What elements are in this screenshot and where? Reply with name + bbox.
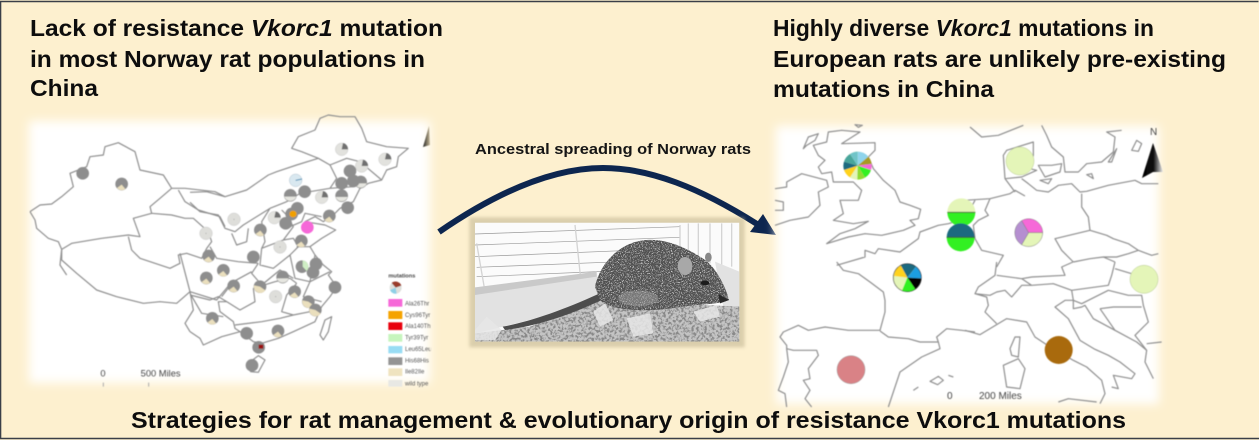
legend: mutations: wild type bbox=[404, 381, 429, 387]
scale label: Europe bbox=[947, 391, 1022, 402]
panel: Europe map bbox=[775, 125, 1163, 407]
panel: China map bbox=[29, 115, 433, 387]
legend: mutations: mutations bbox=[388, 273, 415, 279]
legend: mutations: Ala26Thr bbox=[405, 301, 429, 307]
rat tail bbox=[503, 294, 602, 330]
legend: mutations: Cys96Tyr bbox=[405, 313, 430, 319]
north arrow: China bbox=[423, 126, 430, 147]
pie chart: Denmark bbox=[1006, 147, 1034, 175]
legend: mutations: His68His bbox=[405, 358, 429, 364]
pie charts: China bbox=[76, 143, 391, 372]
pie chart: Belgium bbox=[947, 223, 975, 251]
scale label: Europe: 0 bbox=[947, 391, 953, 402]
photo: Norway rat bbox=[469, 217, 745, 347]
arrow: China to Europe bbox=[439, 168, 776, 235]
heading: Europe: mutations in China bbox=[773, 76, 994, 102]
north arrow: Europe bbox=[1142, 127, 1163, 178]
China south-west outline bbox=[62, 250, 233, 332]
footer heading: Strategies for rat management & evolutionary origin of resistance Vkorc1 mutations bbox=[131, 407, 1126, 433]
label: ancestral spreading: Ancestral spreading of Norway rats bbox=[475, 141, 751, 158]
pie chart: Scotland bbox=[843, 152, 872, 180]
legend: mutations: Tyr39Tyr bbox=[405, 336, 428, 342]
pie chart: Netherlands bbox=[947, 198, 975, 226]
pie chart: Spain bbox=[837, 356, 865, 384]
legend: mutations: Ile82Ile bbox=[405, 370, 425, 376]
pie chart: Italy bbox=[1045, 336, 1073, 364]
scale label: Europe: 200 Miles bbox=[979, 391, 1022, 402]
China west outline bbox=[30, 143, 225, 275]
heading: China: China bbox=[30, 75, 98, 101]
Italy and central Europe borders bbox=[965, 262, 1162, 404]
heading: China bbox=[30, 15, 443, 101]
bedding bbox=[475, 300, 739, 342]
legend: mutations bbox=[388, 273, 433, 387]
France and Iberia coasts bbox=[778, 262, 975, 407]
heading: Europe: Highly diverse Vkorc1 mutations in bbox=[773, 15, 1154, 41]
legend: mutations: Ala140Thr bbox=[405, 324, 433, 330]
rat ears and eye bbox=[678, 257, 692, 275]
scale bar: China: 0 bbox=[100, 368, 106, 378]
heading: Europe: European rats are unlikely pre-existing bbox=[773, 46, 1226, 72]
heading: China: Lack of resistance Vkorc1 mutation bbox=[30, 15, 443, 41]
heading: China: in most Norway rat populations in bbox=[30, 46, 425, 72]
scale bar: China bbox=[100, 368, 181, 387]
pie chart: East bbox=[1130, 265, 1158, 293]
legend: mutations: Leu65Leu bbox=[405, 347, 432, 353]
rat body bbox=[595, 240, 729, 310]
heading: Europe bbox=[773, 15, 1226, 102]
China east outline and provinces bbox=[190, 115, 408, 372]
scale bar: China: 500 Miles bbox=[141, 368, 181, 378]
pie chart: Germany bbox=[1015, 219, 1043, 247]
north arrow: Europe: N bbox=[1150, 127, 1157, 138]
cage bars bbox=[475, 227, 680, 277]
British Isles and north-west coast bbox=[775, 125, 975, 265]
tray bbox=[475, 274, 598, 330]
pie chart: France bbox=[893, 264, 921, 292]
northern Europe coasts and borders bbox=[965, 125, 1158, 267]
